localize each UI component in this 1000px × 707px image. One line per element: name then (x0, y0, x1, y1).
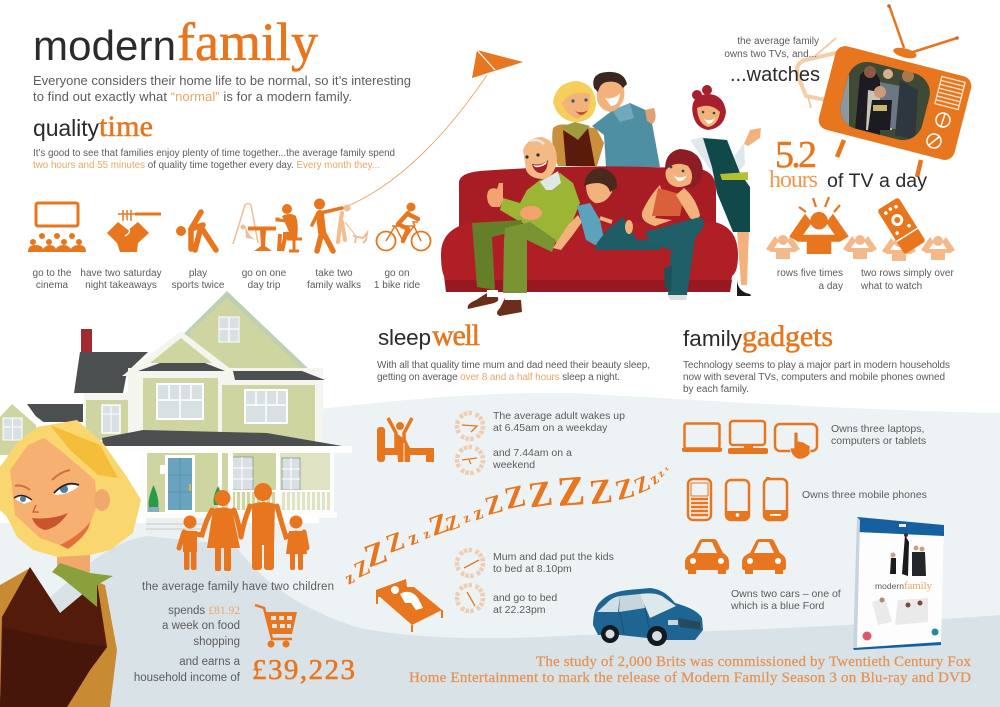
TV caption: owns two TVs, and... (724, 49, 817, 60)
icon: desktop computer (728, 421, 768, 454)
TV caption: the average family (737, 36, 819, 47)
panel: family gadgets (593, 320, 950, 650)
icon: family of four (179, 483, 307, 571)
title: family (177, 12, 318, 72)
icon: person asleep in bed (376, 579, 442, 632)
snoring zzz wave: z (662, 465, 671, 472)
panel: TV (724, 4, 973, 292)
heading: family gadgets (683, 320, 833, 353)
label: computers: computers or tablets (831, 435, 926, 447)
snoring zzz wave: z (421, 527, 432, 543)
quality time text: It’s good to see that families enjoy plenty of time together...the average family spend (33, 148, 395, 159)
heading: quality time (33, 110, 153, 143)
quality time text: two hours and 55 minutes of quality time together every day. Every month they... (33, 160, 380, 171)
clock: 6.45am (457, 413, 483, 439)
activity labels: have two saturday (80, 268, 162, 279)
TV caption (724, 36, 820, 86)
snoring zzz wave: Z (630, 470, 654, 499)
gadgets text: Technology seems to play a major part in modern households (683, 360, 950, 371)
snoring zzz wave: z (471, 501, 486, 525)
activity labels: cinema (36, 280, 69, 291)
label: phones: Owns three mobile phones (802, 489, 927, 501)
TV labels: two rows simply over (861, 268, 954, 279)
icon: car two (742, 539, 786, 574)
wake-up text: The average adult wakes up (493, 410, 625, 422)
snoring zzz wave: z (461, 511, 472, 527)
icon: smartphone (726, 480, 749, 520)
snoring zzz wave: Z (350, 554, 374, 583)
snoring zzz wave: Z (482, 489, 506, 521)
footer credit text: Home Entertainment to mark the release of Modern Family Season 3 on Blu-ray and DVD (409, 670, 971, 686)
intro text: to find out exactly what “normal” is for a modern family. (33, 89, 352, 104)
panel: quality time (28, 50, 523, 291)
ground floor and porch (102, 430, 352, 535)
snoring zzz wave: z (647, 470, 662, 488)
mother's clothing (0, 567, 117, 707)
mother's head (0, 420, 141, 557)
sofa (441, 166, 738, 292)
TV labels: a day (819, 281, 843, 292)
statistics: children, food, income: spends £81.92 (168, 605, 240, 617)
statistic: 5.2 hours of TV a day: hours (769, 167, 818, 193)
label: computers (831, 423, 926, 447)
intro text (33, 73, 411, 104)
statistics: children, food, income: and earns a (179, 656, 241, 668)
illustration: Blu-ray box (853, 517, 944, 650)
bedtime text: Mum and dad put the kids (493, 551, 614, 563)
clock: 22.23pm (457, 585, 483, 611)
activity labels: go on (384, 268, 410, 279)
statistics: children, food, income: shopping (193, 636, 240, 648)
panel: sleep well (342, 319, 671, 632)
illustration: family on sofa (441, 72, 761, 316)
upper gables and walls (84, 291, 325, 448)
boy (553, 168, 662, 250)
clock: 7.44am (457, 447, 483, 473)
label: computers: Owns three laptops, (831, 423, 924, 435)
icon: person waking in bed (377, 418, 434, 462)
kite string (345, 75, 487, 207)
icon: shopping cart (255, 605, 297, 648)
label: cars (730, 588, 841, 612)
icon: day trip (233, 204, 302, 251)
statistics: children, food, income: a week on food (162, 620, 240, 632)
icon: family walk (312, 198, 367, 251)
icon: takeaway (107, 210, 161, 252)
snoring zzz wave: Z (501, 477, 529, 516)
activity labels: sports twice (172, 280, 225, 291)
snoring zzz wave: Z (425, 507, 453, 543)
snoring zzz wave (342, 465, 671, 588)
snoring zzz wave: z (405, 526, 421, 550)
TV labels (777, 268, 954, 292)
mother's neck and scarf (52, 545, 113, 607)
snoring zzz wave: Z (382, 525, 408, 559)
snoring zzz wave: Z (443, 511, 463, 536)
intro text: Everyone considers their home life to be normal, so it’s interesting (33, 73, 411, 88)
bedtime text: and go to bed (493, 592, 557, 604)
snoring zzz wave: z (655, 467, 667, 480)
heading: family gadgets: family (683, 326, 743, 351)
footer credit text: The study of 2,000 Brits was commissioned by Twentieth Century Fox (536, 654, 972, 670)
heading: quality time: time (99, 110, 153, 143)
icon: car one (685, 539, 729, 574)
label: cars: which is a blue Ford (730, 600, 825, 612)
statistics: children, food, income: household income of (134, 672, 241, 684)
activity labels: night takeaways (85, 280, 157, 291)
standing woman (690, 85, 761, 296)
sleep text: getting on average over 8 and a half hours sleep a night. (377, 372, 620, 383)
statistic: 5.2 hours of TV a day: of TV a day (827, 170, 927, 192)
icon: tablet with hand (775, 424, 817, 459)
icon: orange TV (817, 4, 973, 177)
gadgets text: now with several TVs, computers and mobile phones owned (683, 372, 945, 383)
illustration: house (0, 291, 352, 535)
activity labels: go on one (242, 268, 287, 279)
sleep text (377, 360, 650, 383)
icon: keypad phone (688, 479, 711, 520)
snoring zzz wave: Z (359, 533, 391, 574)
clock: 8.10pm (457, 550, 483, 576)
photo on TV screen (840, 62, 930, 140)
icon: bike (376, 202, 430, 250)
icon: flip phone (764, 477, 787, 520)
illustration: blue Ford car (593, 588, 703, 646)
activity labels: play (189, 268, 207, 279)
footer credit text (409, 654, 972, 686)
heading: quality time: quality (33, 115, 100, 141)
quality time text (33, 148, 395, 171)
bedtime text: to bed at 8.10pm (493, 563, 572, 575)
activity labels: go to the (33, 268, 72, 279)
gadgets text: by each family. (683, 384, 749, 395)
icon: arguing figures (766, 197, 955, 261)
mother on sofa (642, 149, 704, 300)
illustration: Blu-ray box: modern (875, 581, 904, 591)
TV labels: what to watch (860, 281, 922, 292)
snoring zzz wave: Z (612, 472, 638, 507)
heading: sleep well: well (432, 319, 480, 352)
statistics: children, food, income: the average family have two children (142, 581, 334, 593)
background: pale blue band (0, 393, 1000, 707)
activity labels: take two (315, 268, 353, 279)
gadgets text (683, 360, 950, 395)
activity labels: 1 bike ride (374, 280, 421, 291)
title: modern (33, 22, 176, 69)
statistic: income: £39,223 (252, 654, 355, 686)
statistics: children, food, income (134, 581, 355, 686)
icon: pale second TV (797, 38, 840, 108)
wake-up text: at 6.45am on a weekday (493, 422, 608, 434)
icon: laptop (682, 424, 722, 452)
icon: remote control (877, 197, 926, 254)
heading: sleep well (378, 319, 480, 352)
icon: kite (472, 50, 523, 78)
icon: cinema (28, 203, 86, 252)
TV caption: ...watches (730, 64, 820, 86)
grandfather (468, 137, 580, 316)
illustration: blonde mother close-up (0, 420, 141, 707)
snoring zzz wave: Z (526, 473, 555, 516)
wake-up text (492, 410, 625, 471)
bedtime text: at 22.23pm (493, 604, 546, 616)
sleep text: With all that quality time mum and dad need their beauty sleep, (377, 360, 650, 371)
chimney and side roof (74, 329, 148, 393)
activity labels (33, 268, 421, 291)
label: cars: Owns two cars – one of (731, 588, 841, 600)
statistic: 5.2 hours of TV a day (769, 134, 927, 193)
activity labels: family walks (307, 280, 361, 291)
title (33, 12, 318, 72)
wake-up text: weekend (492, 459, 535, 471)
activity labels: day trip (248, 280, 281, 291)
icon: sports (176, 212, 216, 250)
bedtime text (493, 551, 614, 616)
snoring zzz wave: Z (587, 471, 614, 512)
TV labels: rows five times (777, 268, 843, 279)
father behind sofa (592, 72, 660, 167)
snoring zzz wave: z (342, 567, 357, 588)
wake-up text: and 7.44am on a (493, 447, 572, 459)
heading: family gadgets: gadgets (742, 320, 833, 353)
snoring zzz wave: Z (556, 468, 587, 516)
blonde woman behind sofa (552, 81, 604, 166)
statistic: 5.2 hours of TV a day: 5.2 (775, 134, 817, 176)
heading: sleep well: sleep (378, 325, 431, 350)
background: darker grey band (0, 536, 1000, 707)
small left house (0, 398, 83, 455)
illustration: Blu-ray box: family (904, 580, 932, 592)
